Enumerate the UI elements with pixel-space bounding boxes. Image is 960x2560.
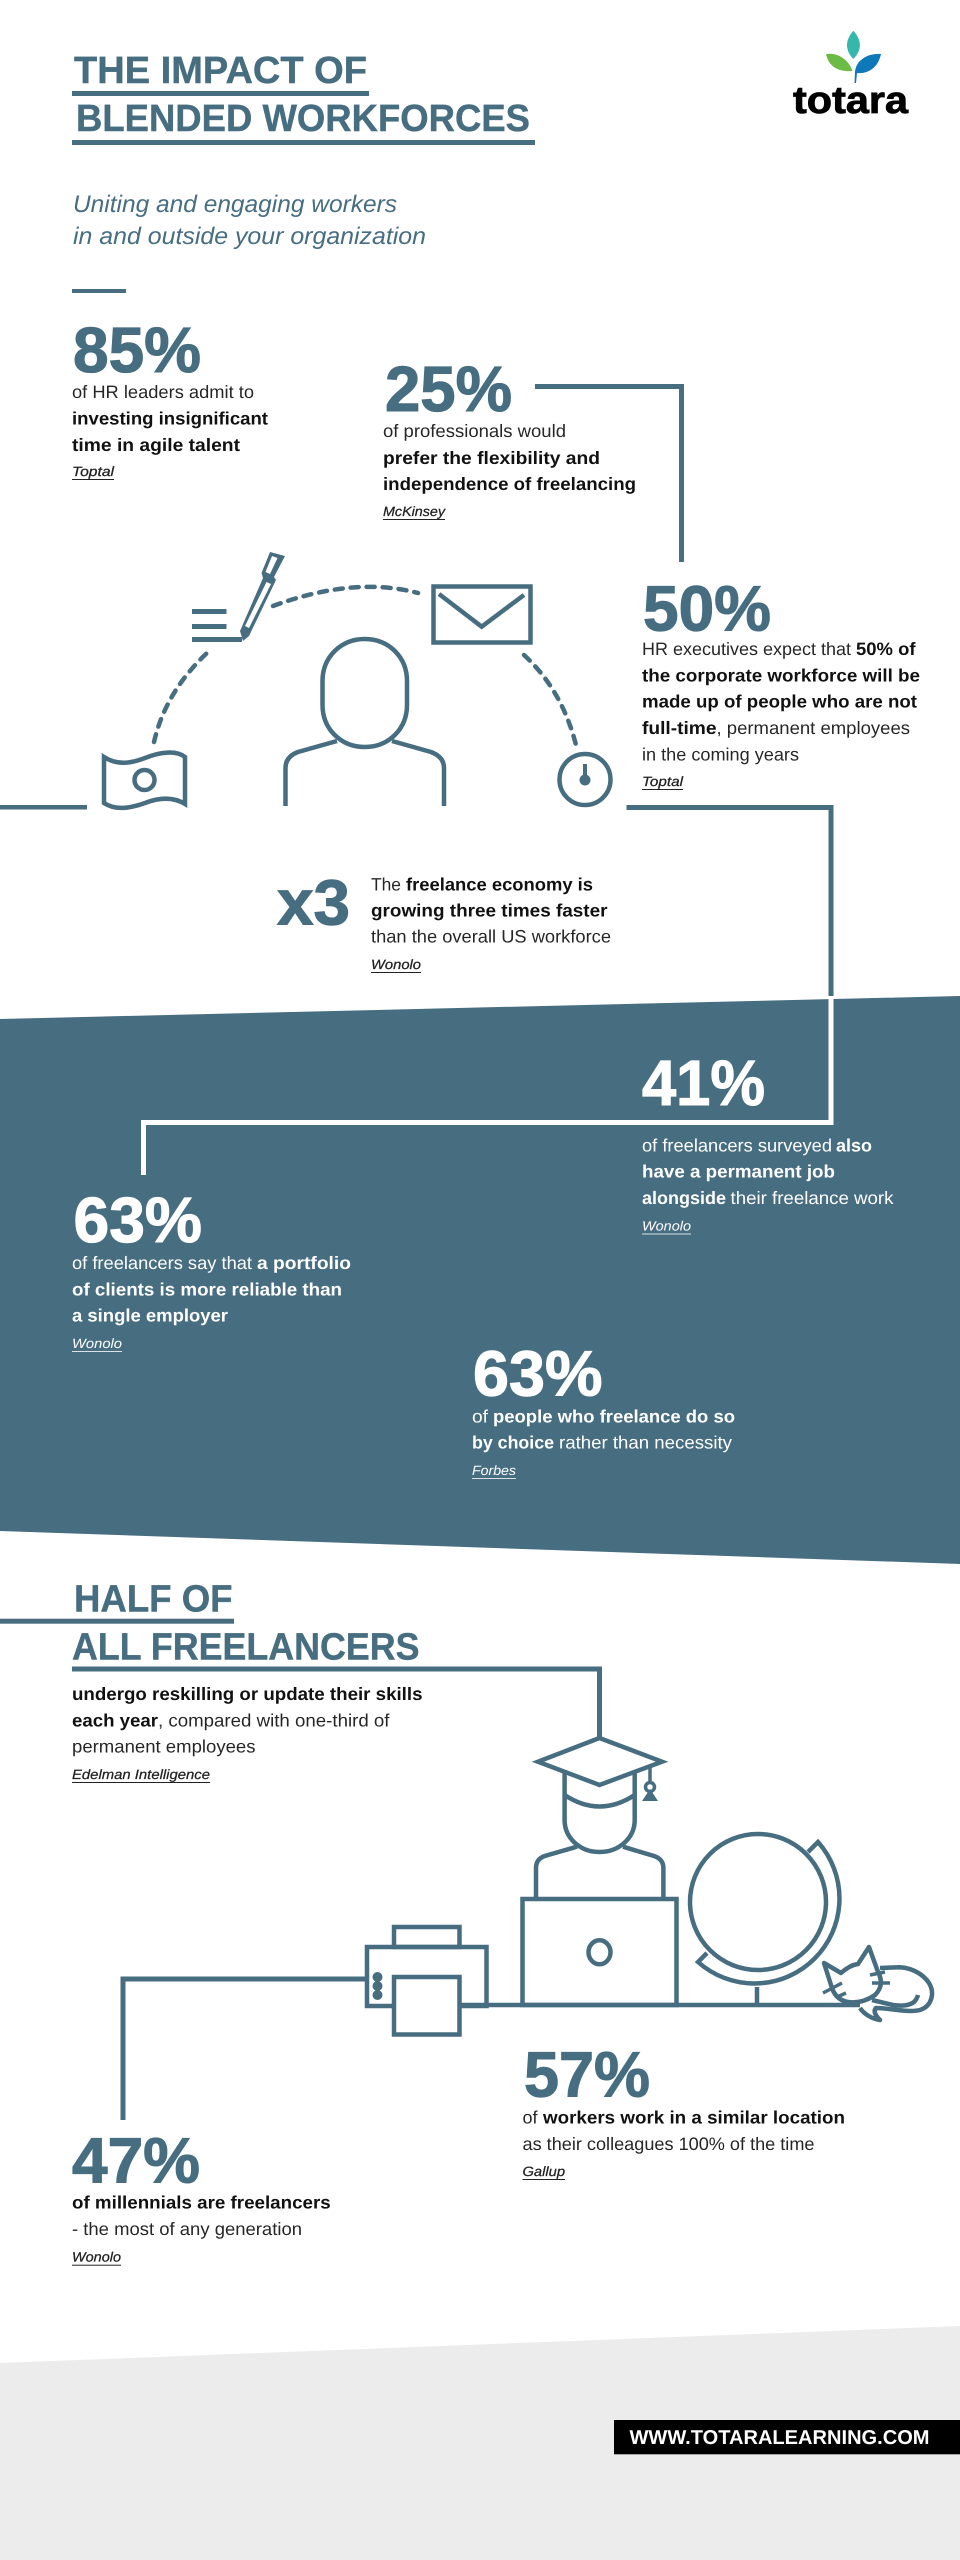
stat: 63% by choice bbox=[472, 1338, 735, 1479]
stat: x3: than the overall US workforce bbox=[371, 927, 611, 947]
stat: 63% portfolio: a portfolio bbox=[257, 1253, 351, 1273]
stat: 25%: independence of freelancing bbox=[383, 474, 636, 494]
stat: 41%: also bbox=[836, 1136, 872, 1156]
connector: heading to graduate bbox=[72, 1669, 600, 1738]
shelf line bbox=[461, 2003, 860, 2007]
stat: 63% portfolio: of freelancers say that bbox=[72, 1253, 252, 1273]
stat: 63% by choice: rather than necessity bbox=[559, 1433, 732, 1453]
stat: 41%: of freelancers surveyed bbox=[642, 1136, 832, 1156]
stat: 25% bbox=[383, 353, 636, 520]
heading: half of all freelancers: ALL FREELANCERS bbox=[72, 1626, 420, 1668]
connector: right of icons down into band bbox=[626, 808, 831, 998]
stat: 85%: time in agile talent bbox=[72, 435, 240, 455]
logo: totara bbox=[793, 31, 909, 122]
website label bbox=[614, 2420, 960, 2454]
stat: 63% by choice: Forbes bbox=[472, 1463, 516, 1478]
stat: 85%: 85% bbox=[73, 314, 201, 386]
stat: 50%: 50% of bbox=[856, 639, 917, 659]
stat: 57%: workers work in a similar location bbox=[542, 2107, 845, 2127]
heading: half of all freelancers bbox=[0, 1579, 420, 1668]
stat: 41%: 41% bbox=[642, 1047, 765, 1119]
stat: 50%: in the coming years bbox=[642, 744, 799, 764]
stat: x3: growing three times faster bbox=[371, 901, 608, 921]
icon: banknote bbox=[104, 753, 185, 808]
stat: x3: x3 bbox=[277, 866, 350, 938]
stat: 41% bbox=[642, 1047, 895, 1234]
text block: reskilling: Edelman Intelligence bbox=[72, 1767, 210, 1782]
stat: 41%: alongside bbox=[642, 1188, 726, 1208]
stat: 50% bbox=[642, 572, 920, 790]
stat: 63% by choice: 63% bbox=[473, 1338, 602, 1410]
stat: 63% portfolio: 63% bbox=[74, 1184, 202, 1256]
stat: x3: Wonolo bbox=[371, 957, 422, 972]
stat: 85% bbox=[72, 314, 268, 480]
icon: clock bbox=[560, 754, 610, 805]
stat: 63% portfolio: of clients is more reliable than bbox=[72, 1279, 342, 1299]
website label: WWW.TOTARALEARNING.COM bbox=[630, 2427, 930, 2449]
stat: 25%: of professionals would bbox=[383, 421, 566, 441]
stat: 25%: 25% bbox=[385, 353, 512, 425]
text block: reskilling bbox=[72, 1684, 422, 1783]
icon: laptop bbox=[522, 1899, 676, 2005]
dashed arc: money to pen bbox=[154, 653, 207, 742]
subtitle: Uniting and engaging workers bbox=[73, 191, 397, 218]
stat: 57%: Gallup bbox=[522, 2164, 566, 2179]
stat: 63% by choice: of bbox=[472, 1406, 489, 1426]
icon: graduate with cap bbox=[536, 1738, 663, 1898]
stat: 50%: 50% bbox=[643, 572, 771, 644]
stat: 41%: their freelance work bbox=[730, 1188, 895, 1208]
stat: 50%: HR executives expect that bbox=[642, 639, 851, 659]
icon: pen and written lines bbox=[192, 552, 285, 642]
icon: printer bbox=[367, 1927, 486, 2034]
logo: totara: totara bbox=[793, 80, 909, 122]
stat: 63% portfolio bbox=[72, 1184, 351, 1352]
stat: 50%: made up of people who are not bbox=[642, 692, 917, 712]
subtitle bbox=[73, 191, 426, 250]
stat: 57%: of bbox=[522, 2107, 538, 2127]
stat: 47%: - the most of any generation bbox=[72, 2219, 302, 2239]
stat: 63% portfolio: Wonolo bbox=[72, 1336, 123, 1351]
icon: envelope bbox=[434, 586, 530, 642]
stat: 25%: prefer the flexibility and bbox=[383, 448, 600, 468]
stat: 47%: 47% bbox=[72, 2125, 200, 2197]
connector: 25% to 50% bbox=[535, 386, 682, 562]
title bbox=[72, 50, 535, 145]
title: BLENDED WORKFORCES bbox=[76, 98, 530, 140]
short divider dash bbox=[72, 289, 126, 293]
stat: 63% portfolio: a single employer bbox=[72, 1306, 228, 1326]
icon: cat bbox=[823, 1947, 932, 2020]
stat: x3: The bbox=[371, 875, 401, 895]
stat: 41%: have a permanent job bbox=[642, 1162, 835, 1182]
stat: x3: freelance economy is bbox=[406, 875, 593, 895]
stat: 85%: of HR leaders admit to bbox=[72, 382, 254, 402]
stat: 85%: investing insignificant bbox=[72, 408, 268, 428]
text block: reskilling: , compared with one-third of bbox=[158, 1711, 391, 1731]
icon: globe bbox=[690, 1834, 839, 2005]
connector: printer to 47% bbox=[123, 1979, 366, 2120]
text block: reskilling: each year bbox=[72, 1711, 158, 1731]
text block: reskilling: undergo reskilling or update their skills bbox=[72, 1684, 422, 1704]
stat: 47%: Wonolo bbox=[72, 2250, 122, 2265]
heading: half of all freelancers: HALF OF bbox=[74, 1579, 232, 1621]
stat: 41%: Wonolo bbox=[642, 1218, 692, 1234]
stat: 50%: the corporate workforce will be bbox=[642, 666, 920, 686]
stat: 57% bbox=[522, 2039, 845, 2180]
connector: white line in band bbox=[144, 996, 831, 1175]
subtitle: in and outside your organization bbox=[73, 223, 426, 250]
text block: reskilling: permanent employees bbox=[72, 1737, 256, 1757]
stat: 50%: , permanent employees bbox=[716, 718, 910, 738]
dashed arc: pen to envelope bbox=[273, 587, 418, 606]
icon: person at centre bbox=[286, 639, 444, 806]
stat: 25%: McKinsey bbox=[383, 504, 446, 519]
stat: 47% bbox=[72, 2125, 331, 2266]
title: THE IMPACT OF bbox=[74, 50, 367, 92]
dashed arc: envelope to clock bbox=[524, 655, 576, 745]
stat: 57%: as their colleagues 100% of the time bbox=[522, 2134, 814, 2154]
connector: left stub bbox=[0, 805, 87, 810]
stat: 63% by choice: people who freelance do so bbox=[493, 1406, 735, 1426]
teal background band bbox=[0, 996, 960, 1564]
stat: 50%: full-time bbox=[642, 718, 716, 738]
stat: 57%: 57% bbox=[524, 2039, 650, 2111]
stat: 50%: Toptal bbox=[642, 774, 684, 789]
stat: 47%: of millennials are freelancers bbox=[72, 2192, 331, 2212]
stat: x3 bbox=[277, 866, 611, 973]
stat: 85%: Toptal bbox=[72, 464, 115, 479]
stat: 63% by choice: by choice bbox=[472, 1433, 554, 1453]
grey footer band bbox=[0, 2326, 960, 2560]
